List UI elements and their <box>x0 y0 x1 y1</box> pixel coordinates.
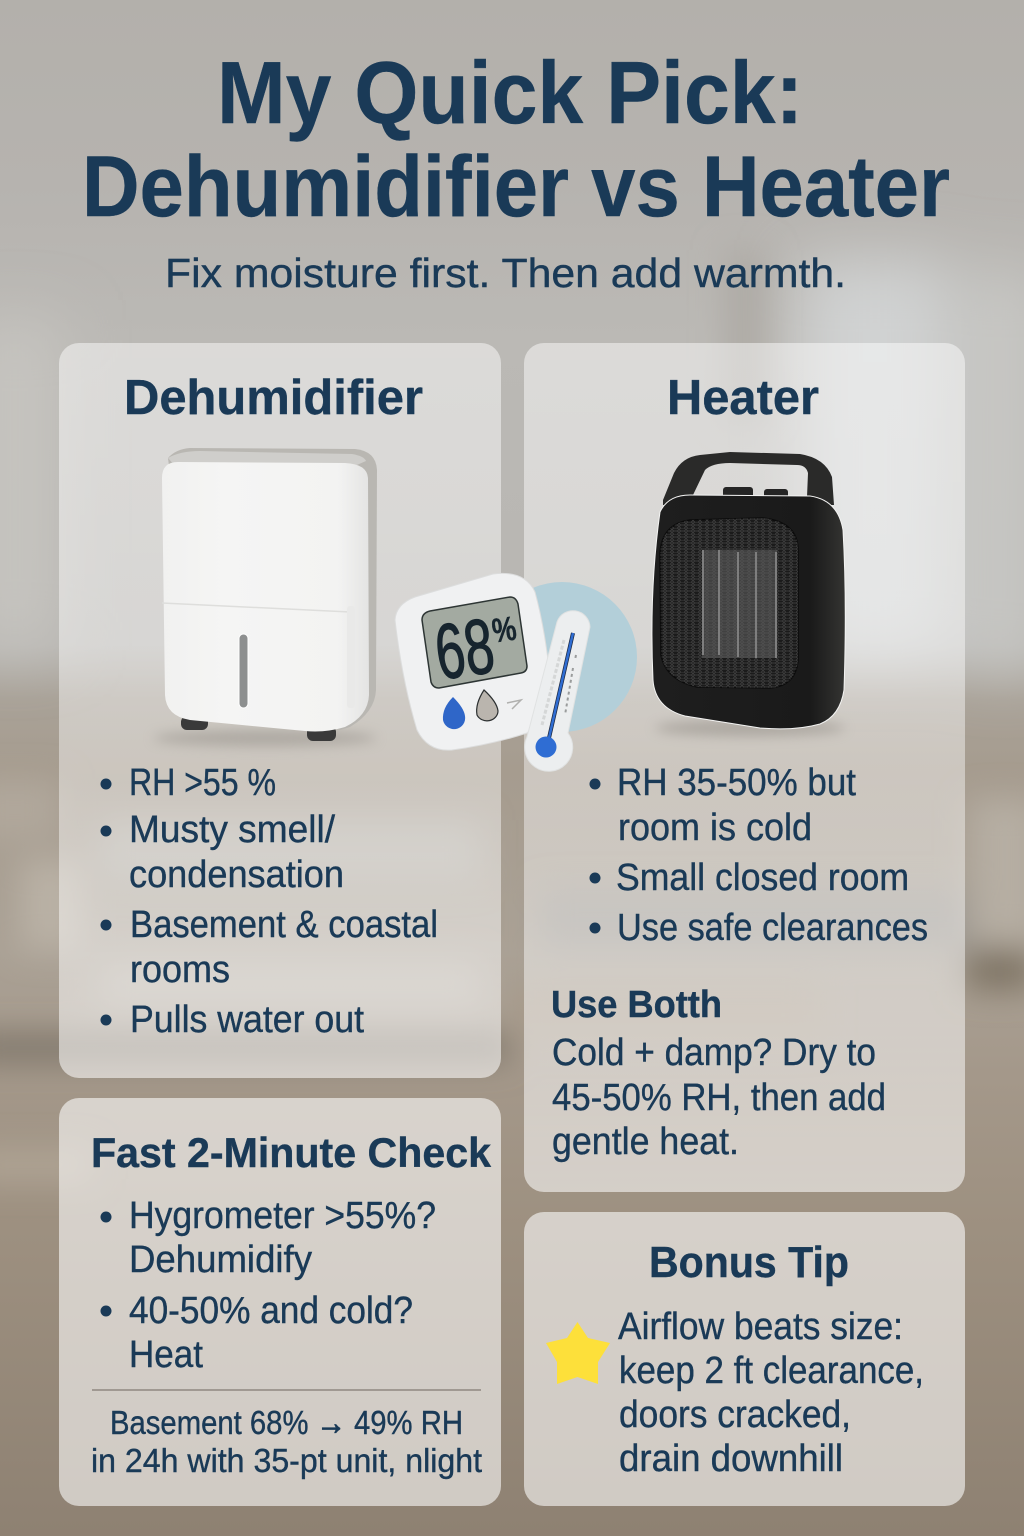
bullet list: heater: Small closed room <box>616 857 909 899</box>
bullet list: dehumidifier: rooms <box>130 949 230 991</box>
tip text: keep 2 ft clearance, <box>619 1350 924 1392</box>
bullet list: dehumidifier: condensation <box>129 854 344 896</box>
heading: fast check: Fast 2-Minute Check <box>91 1129 492 1176</box>
check list: Heat <box>129 1334 203 1376</box>
use both text block: gentle heat. <box>552 1121 739 1163</box>
tip text <box>618 1306 924 1480</box>
title: My Quick Pick: <box>217 43 803 142</box>
heading: bonus tip: Bonus Tip <box>649 1238 849 1287</box>
thermometer <box>525 611 590 771</box>
title <box>82 43 950 235</box>
tip text: doors cracked, <box>619 1394 851 1436</box>
humidity drops <box>443 697 465 729</box>
check list: 40-50% and cold? <box>129 1290 413 1332</box>
bullet list: heater: RH 35-50% but <box>617 762 856 804</box>
subtitle: Fix moisture first. Then add warmth. <box>165 250 846 296</box>
bullet list: dehumidifier: Musty smell/ <box>129 809 335 851</box>
panel: dehumidifier <box>59 343 501 1078</box>
tip text: drain downhill <box>619 1438 843 1480</box>
reading 68%: 68 <box>430 601 499 696</box>
hygrometer display <box>422 597 527 688</box>
panel: heater <box>524 343 965 1192</box>
bullet list: heater: Use safe clearances <box>617 907 928 949</box>
example result: in 24h with 35-pt unit, nlight <box>91 1442 482 1479</box>
check list: Hygrometer >55%? <box>129 1195 436 1237</box>
use both text block: 45-50% RH, then add <box>552 1077 886 1119</box>
check list: Dehumidify <box>129 1239 312 1281</box>
reading 68%: % <box>490 610 519 651</box>
bullet list: heater <box>590 762 928 949</box>
example result: Basement 68% → 49% RH <box>110 1404 463 1441</box>
bullet list: dehumidifier: Pulls water out <box>130 999 364 1041</box>
bullet list: dehumidifier <box>100 762 438 1041</box>
bullet list: dehumidifier: Basement & coastal <box>130 904 438 946</box>
icon: hygrometer and thermometer <box>395 573 637 771</box>
bullet list: heater: room is cold <box>618 807 812 849</box>
title: Dehumidifier vs Heater <box>82 139 950 235</box>
panel: bonus tip <box>524 1212 965 1506</box>
icon: star <box>546 1322 610 1384</box>
use both text block: Use Botth <box>551 984 722 1026</box>
use both text block: Cold + damp? Dry to <box>552 1032 876 1074</box>
panel: fast 2-minute check <box>59 1098 501 1506</box>
icon: space heater <box>652 452 845 736</box>
example result <box>91 1404 482 1479</box>
hygrometer body <box>395 573 549 750</box>
icon: dehumidifier unit <box>153 448 377 746</box>
pale blue disc <box>487 582 637 732</box>
bullet list: dehumidifier: RH >55 % <box>129 762 276 804</box>
check list <box>100 1195 436 1376</box>
use both text block <box>551 984 886 1163</box>
heading: dehumidifier: Dehumidifier <box>124 371 423 425</box>
tip text: Airflow beats size: <box>618 1306 903 1348</box>
heading: heater: Heater <box>667 371 819 425</box>
